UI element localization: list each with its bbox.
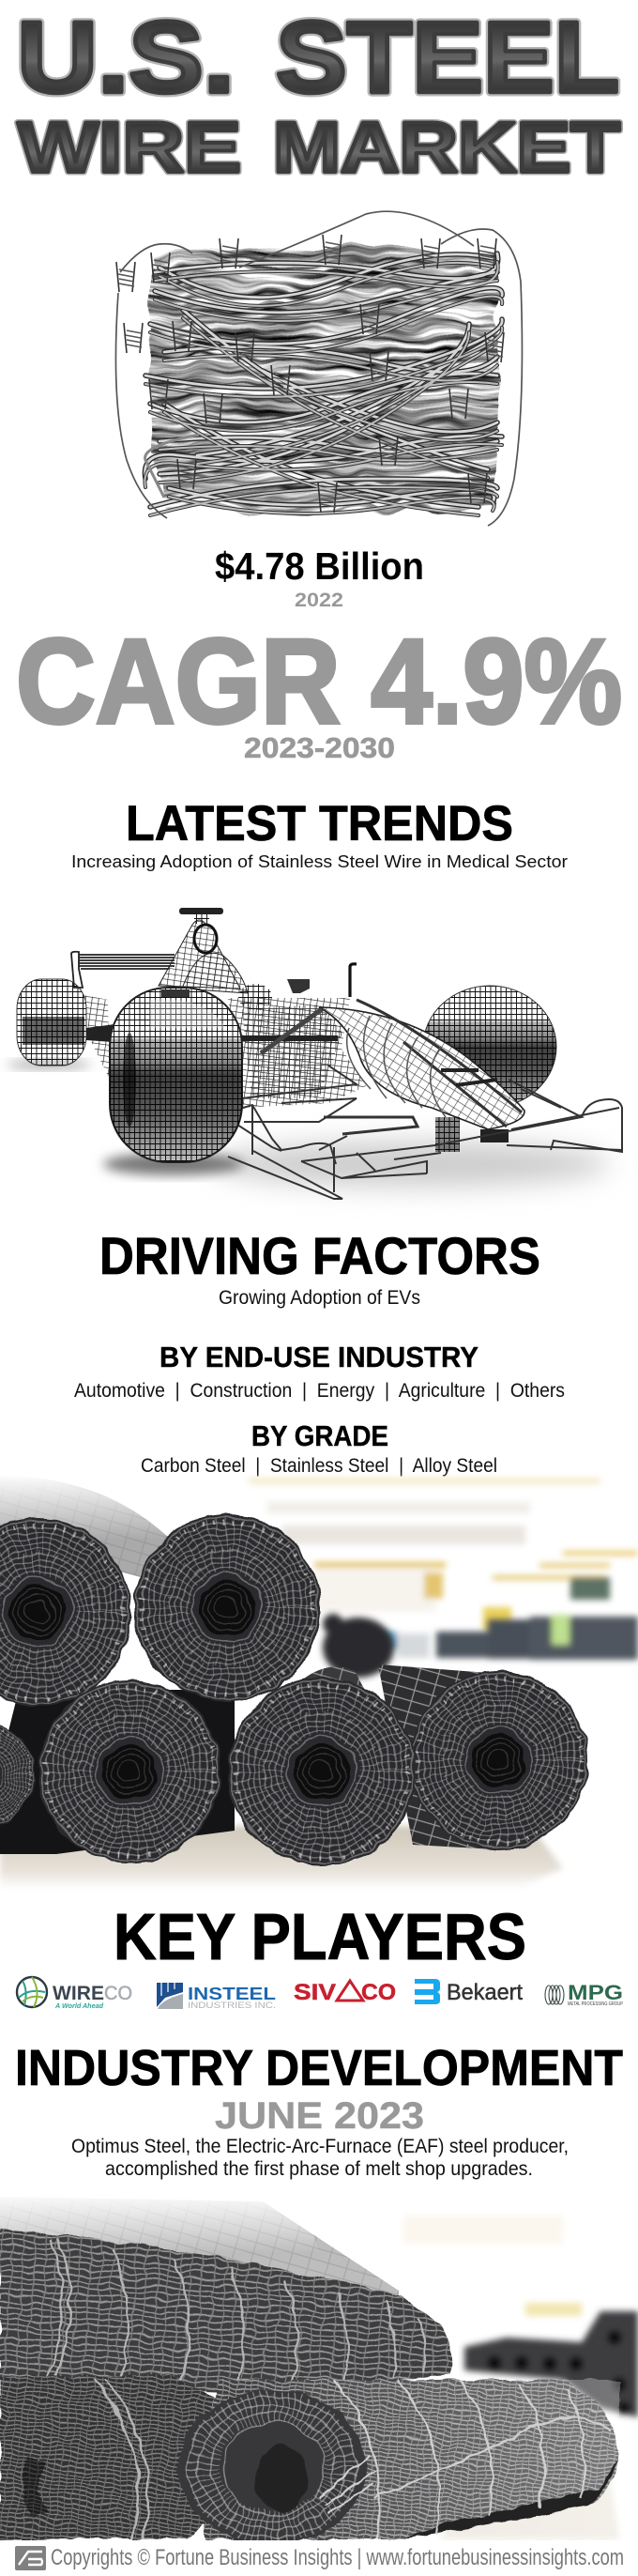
photo: steel wire mesh rolls in factory	[0, 1474, 638, 1889]
logo: WireCo: WIRE	[53, 1983, 104, 2004]
latest trends description: Increasing Adoption of Stainless Steel Wire in Medical Sector	[71, 852, 568, 871]
title line: U.S. STEEL	[17, 0, 619, 114]
development description: accomplished the first phase of melt shop upgrades.	[105, 2158, 533, 2180]
development description: Optimus Steel, the Electric-Arc-Furnace (EAF) steel producer,	[71, 2136, 569, 2157]
title line: WIRE MARKET: WIRE	[18, 108, 241, 188]
photo: stacked wire mesh rolls	[0, 2192, 638, 2576]
logo: Insteel Industries	[157, 1983, 276, 2010]
logo: WireCo	[17, 1977, 132, 2010]
development description	[71, 2136, 569, 2180]
title line: U.S. STEEL: U.S.	[17, 0, 235, 114]
barbed wire coil illustration	[115, 211, 522, 526]
logo: Insteel Industries: INSTEEL	[188, 1985, 276, 2003]
title line: WIRE MARKET: MARKET	[273, 108, 620, 188]
heading: by end-use industry: BY END-USE INDUSTRY	[160, 1341, 478, 1373]
logo: Bekaert	[415, 1979, 523, 2005]
heading: driving factors: DRIVING FACTORS	[99, 1226, 540, 1285]
title line: U.S. STEEL: STEEL	[276, 0, 619, 114]
logo: Insteel Industries: INDUSTRIES INC.	[188, 2001, 276, 2010]
grade list: Carbon Steel | Stainless Steel | Alloy Steel	[141, 1455, 497, 1477]
development date: JUNE 2023	[215, 2095, 424, 2137]
footer	[15, 2545, 624, 2570]
market size year: 2022	[295, 590, 343, 611]
market size value: $4.78 Billion	[215, 544, 424, 588]
title	[17, 0, 620, 188]
logo: Sivaco	[294, 1980, 396, 2005]
logo: Bekaert: Bekaert	[447, 1980, 523, 2005]
icon: Fortune Business Insights logo	[15, 2546, 46, 2570]
title line: WIRE MARKET: WIRE	[18, 108, 241, 188]
wireframe F1 car illustration	[7, 908, 622, 1199]
logo: MPG	[545, 1981, 624, 2007]
heading: key players: KEY PLAYERS	[114, 1900, 526, 1973]
logo: MPG: MPG	[568, 1981, 623, 2004]
end-use industry list: Automotive | Construction | Energy | Agriculture | Others	[74, 1380, 565, 1402]
logo: WireCo: A World Ahead	[54, 2001, 103, 2010]
driving factors description: Growing Adoption of EVs	[219, 1287, 420, 1309]
logo: WireCo: CO	[104, 1983, 132, 2004]
logo: Sivaco: SIV	[294, 1980, 336, 2005]
title line: U.S. STEEL: U.S.	[17, 0, 235, 114]
CAGR period: 2023-2030	[244, 731, 395, 764]
title line: WIRE MARKET	[18, 108, 620, 188]
logo: Sivaco: CO	[361, 1980, 396, 2005]
title line: WIRE MARKET: MARKET	[273, 108, 620, 188]
title line: U.S. STEEL: STEEL	[276, 0, 619, 114]
company logos	[17, 1977, 624, 2010]
heading: latest trends: LATEST TRENDS	[126, 796, 513, 851]
logo: MPG: METAL PROCESSING GROUP	[568, 2001, 624, 2007]
heading: by grade: BY GRADE	[251, 1419, 388, 1452]
